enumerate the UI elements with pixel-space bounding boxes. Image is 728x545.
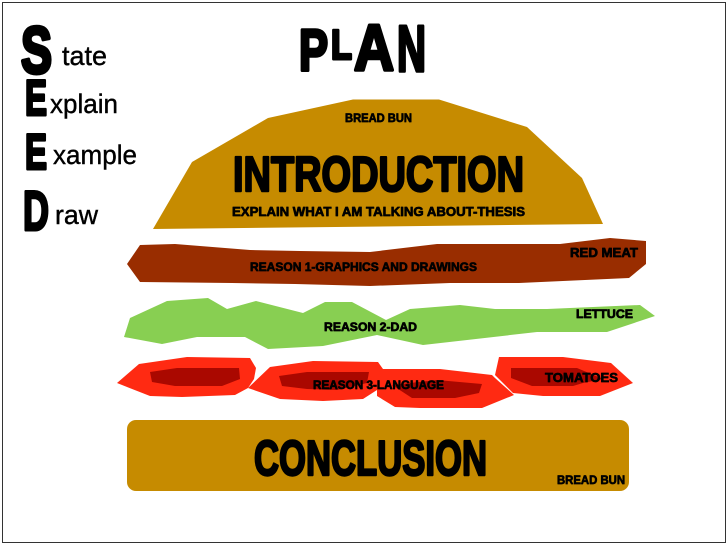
S: State: tate <box>62 41 107 71</box>
D: Draw <box>23 179 98 242</box>
E: Example <box>25 124 137 180</box>
E: Explain: xplain <box>50 89 118 119</box>
tomato slice 3 <box>377 369 514 408</box>
heading: conclusion: CONCLUSION <box>254 432 487 486</box>
tomato slice 4 <box>495 357 633 396</box>
text: thesis: EXPLAIN WHAT I AM TALKING ABOUT-THESIS <box>232 205 525 219</box>
D: Draw: raw <box>55 200 98 230</box>
label: tomatoes: TOMATOES <box>545 370 618 385</box>
panel: red meat <box>127 238 646 286</box>
title: PLAN: L <box>331 21 352 68</box>
label: red meat: RED MEAT <box>570 246 638 260</box>
S: State: S <box>21 13 52 87</box>
SEED mnemonic <box>21 13 137 242</box>
E: Example: xample <box>53 140 137 170</box>
text: reason 3: REASON 3-LANGUAGE <box>313 378 444 392</box>
text: reason 2: REASON 2-DAD <box>324 320 417 334</box>
E: Example: E <box>25 124 47 180</box>
panel: bottom bread bun <box>127 420 629 491</box>
label: lettuce: LETTUCE <box>576 307 633 321</box>
panel: lettuce <box>124 298 655 349</box>
tomato slice 1 <box>117 357 256 397</box>
title: PLAN: A <box>354 11 394 84</box>
text: reason 1: REASON 1-GRAPHICS AND DRAWINGS <box>250 260 477 274</box>
title: PLAN: P <box>299 18 328 83</box>
D: Draw: D <box>23 179 49 242</box>
E: Explain <box>25 70 118 126</box>
tomato slice 2 <box>248 361 386 401</box>
label: bread bun: BREAD BUN <box>557 473 625 487</box>
panel: top bread bun <box>153 100 603 229</box>
S: State <box>21 13 107 87</box>
title: PLAN <box>299 11 426 85</box>
panel: tomatoes <box>117 357 633 408</box>
label: bread bun: BREAD BUN <box>345 111 412 125</box>
E: Explain: E <box>25 70 47 126</box>
title: PLAN: N <box>397 12 426 85</box>
heading: introduction: INTRODUCTION <box>233 148 524 202</box>
